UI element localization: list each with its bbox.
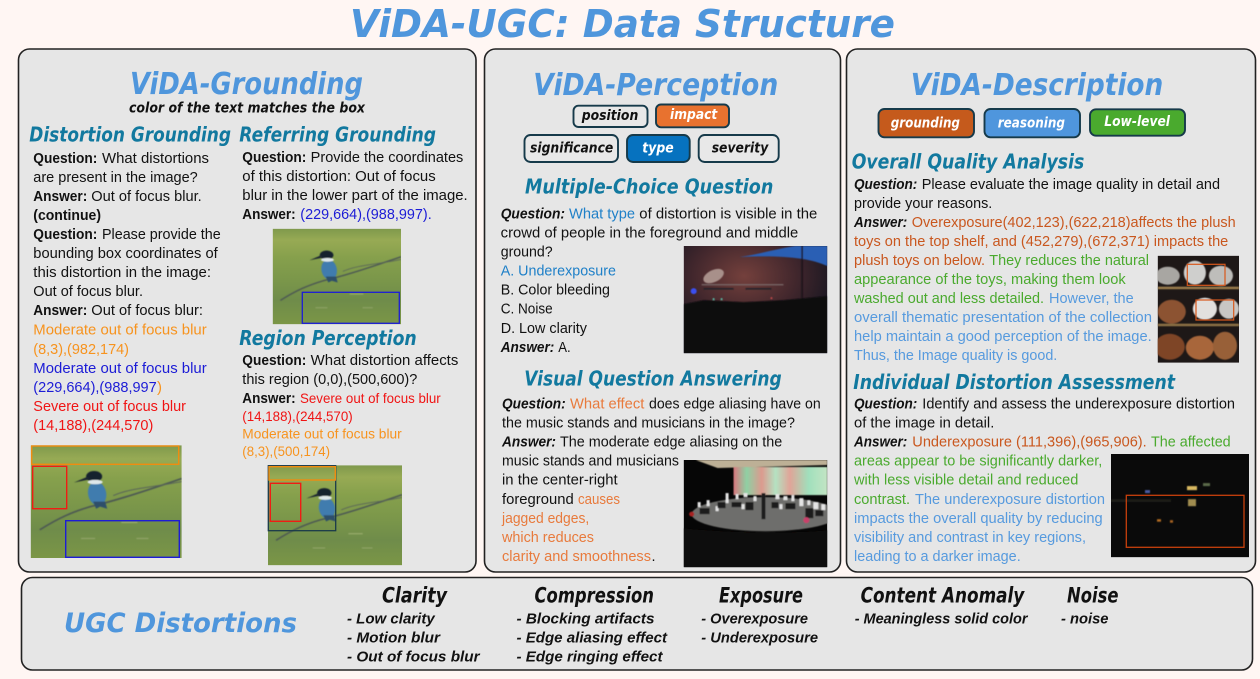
panel: ViDA-Description <box>846 49 1256 572</box>
text block: overall quality Q&A: overall thematic presentation of the collection <box>854 310 1152 326</box>
image: concert crowd <box>684 246 827 353</box>
list: Content Anomaly <box>855 584 1029 627</box>
text block: distortion grounding Q&A: Question: <box>33 151 97 167</box>
text block: distortion grounding Q&A: (14,188),(244,570) <box>33 418 153 434</box>
text block: referring grounding Q&A: Answer: <box>242 207 296 223</box>
text block: distortion grounding Q&A: (8,3),(982,174) <box>33 342 129 358</box>
text block: overall quality Q&A <box>853 177 1236 364</box>
list: Exposure <box>701 584 818 646</box>
text block: referring grounding Q&A <box>242 150 468 223</box>
text block: region perception Q&A: Question: <box>242 353 306 369</box>
text block: individual distortion Q&A: Underexposure (111,396),(965,906). <box>912 434 1147 450</box>
text block: multiple-choice Q&A: What type <box>569 206 635 222</box>
text block: visual question answering Q&A: jagged edges, <box>501 511 589 527</box>
text block: referring grounding Q&A: blur in the lower part of the image. <box>242 188 468 204</box>
panel background: grounding <box>18 49 476 572</box>
tag: significance: significance <box>530 140 613 156</box>
text block: distortion grounding Q&A: Out of focus blur: <box>91 303 203 319</box>
panel: ViDA-Perception <box>484 49 840 572</box>
text block: distortion grounding Q&A: What distortions <box>102 151 209 167</box>
panel background: description <box>846 49 1256 572</box>
image: kingfisher with three boxes <box>31 445 182 558</box>
text block: visual question answering Q&A: clarity and smoothness <box>502 549 651 565</box>
list: Clarity: - Out of focus blur <box>347 649 481 666</box>
list: Clarity: - Low clarity <box>347 610 435 627</box>
text block: multiple-choice Q&A <box>500 206 817 356</box>
text block: individual distortion Q&A: Identify and assess the underexposure distortion <box>922 396 1235 412</box>
text block: visual question answering Q&A: does edge aliasing have on <box>649 396 821 412</box>
text block: referring grounding Q&A: (229,664),(988,997). <box>300 207 432 223</box>
text block: individual distortion Q&A: visibility and contrast in key regions, <box>854 530 1086 546</box>
text block: multiple-choice Q&A: ground? <box>501 244 553 260</box>
list: Noise <box>1061 584 1118 627</box>
list: Exposure: Exposure <box>719 584 803 608</box>
tag: grounding: grounding <box>891 115 960 131</box>
text block: multiple-choice Q&A: C. Noise <box>501 302 553 318</box>
image: kingfisher with region boxes <box>268 465 402 565</box>
text block: visual question answering Q&A: the music stands and musicians in the image? <box>502 415 795 431</box>
tag: reasoning <box>984 109 1080 137</box>
text block: individual distortion Q&A <box>853 396 1235 565</box>
tag: severity <box>699 135 779 162</box>
heading: Distortion Grounding: Distortion Grounding <box>29 122 231 146</box>
text block: individual distortion Q&A: The underexposure distortion <box>915 492 1105 508</box>
text block: distortion grounding Q&A: bounding box coordinates of <box>33 246 219 262</box>
text block: region perception Q&A <box>242 353 458 459</box>
list: Compression: Compression <box>534 584 654 608</box>
text block: multiple-choice Q&A: crowd of people in the foreground and middle <box>501 225 798 241</box>
text block: multiple-choice Q&A: of distortion is visible in the <box>639 206 817 222</box>
text block: distortion grounding Q&A: (229,664),(988,997 <box>33 380 157 396</box>
heading: Overall Quality Analysis: Overall Quality Analysis <box>852 149 1084 173</box>
list: Clarity: Clarity <box>382 584 448 608</box>
list: Compression: - Edge aliasing effect <box>516 630 668 646</box>
text block: individual distortion Q&A: areas appear to be significantly darker, <box>854 454 1102 470</box>
text block: individual distortion Q&A: Question: <box>854 396 917 412</box>
text block: distortion grounding Q&A: this distortion in the image: <box>33 265 211 281</box>
text block: individual distortion Q&A: impacts the overall quality by reducing <box>854 511 1103 527</box>
tag: impact: impact <box>670 107 718 123</box>
panel: UGC Distortions <box>22 578 1252 670</box>
text block: distortion grounding Q&A: Out of focus blur. <box>33 284 143 300</box>
text block: overall quality Q&A: However, the <box>1049 291 1134 307</box>
text block: visual question answering Q&A: What effect <box>570 396 644 412</box>
text block: individual distortion Q&A: of the image in detail. <box>854 415 994 431</box>
tag: type <box>627 135 690 162</box>
text block: visual question answering Q&A <box>501 396 821 565</box>
text block: region perception Q&A: Moderate out of focus blur <box>242 426 402 442</box>
panel background: perception <box>484 49 840 572</box>
text block: visual question answering Q&A: which reduces <box>501 530 594 546</box>
text block: individual distortion Q&A: with less visible detail and reduced <box>853 473 1078 489</box>
text block: overall quality Q&A: Overexposure(402,123),(622,218)affects the plush <box>912 215 1236 231</box>
text block: distortion grounding Q&A: Question: <box>33 227 97 243</box>
tag: significance <box>524 135 618 162</box>
text block: referring grounding Q&A: Provide the coordinates <box>311 150 463 166</box>
text block: distortion grounding Q&A: Severe out of focus blur <box>33 399 186 415</box>
heading: ViDA-Description: ViDA-Description <box>911 68 1163 103</box>
text block: overall quality Q&A: Thus, the Image quality is good. <box>854 348 1057 364</box>
heading: UGC Distortions: UGC Distortions <box>64 608 297 639</box>
heading: ViDA-Perception: ViDA-Perception <box>533 68 778 103</box>
tag: reasoning: reasoning <box>998 115 1065 131</box>
list: Noise: Noise <box>1067 584 1118 608</box>
text block: distortion grounding Q&A: ) <box>157 380 162 396</box>
text block: distortion grounding Q&A: Moderate out of focus blur <box>33 322 207 338</box>
list: Exposure: - Overexposure <box>701 610 808 627</box>
image: plush toys with boxes <box>1155 256 1239 363</box>
text block: individual distortion Q&A: leading to a darker image. <box>854 549 1021 565</box>
list: Noise: - noise <box>1061 610 1108 627</box>
heading: Multiple-Choice Question: Multiple-Choice Question <box>525 174 773 198</box>
subtitle: color of the text matches the box <box>129 100 366 116</box>
text block: referring grounding Q&A: Question: <box>242 150 306 166</box>
list: Exposure: - Underexposure <box>701 630 818 646</box>
tag: position <box>574 106 648 127</box>
text block: overall quality Q&A: Answer: <box>853 215 907 231</box>
text block: overall quality Q&A: toys on the top shelf, and (452,279),(672,371) impacts the <box>854 234 1228 250</box>
tag: type: type <box>642 140 674 156</box>
text block: overall quality Q&A: They reduces the natural <box>989 253 1149 269</box>
text block: overall quality Q&A: plush toys on below. <box>854 253 985 269</box>
tag: grounding <box>878 109 974 137</box>
tag: severity: severity <box>712 140 769 156</box>
heading: ViDA-Grounding: ViDA-Grounding <box>130 67 363 102</box>
text block: referring grounding Q&A: of this distortion: Out of focus <box>242 169 436 185</box>
text block: visual question answering Q&A: The moderate edge aliasing on the <box>560 434 782 450</box>
text block: overall quality Q&A: washed out and less detailed. <box>853 291 1044 307</box>
text block: multiple-choice Q&A: A. Underexposure <box>501 264 616 280</box>
panel: ViDA-Grounding <box>18 49 476 572</box>
text block: distortion grounding Q&A: are present in the image? <box>33 170 198 186</box>
text block: distortion grounding Q&A: Answer: <box>33 189 87 205</box>
text block: distortion grounding Q&A <box>33 151 221 434</box>
text block: overall quality Q&A: help maintain a good perception of the image. <box>854 329 1152 345</box>
text block: overall quality Q&A: Please evaluate the image quality in detail and <box>922 177 1220 193</box>
text block: visual question answering Q&A: foreground <box>502 492 574 508</box>
text block: distortion grounding Q&A: Please provide the <box>102 227 221 243</box>
tag: Low-level: Low-level <box>1104 114 1171 130</box>
text block: region perception Q&A: (14,188),(244,570) <box>242 408 353 424</box>
text block: distortion grounding Q&A: Out of focus blur. <box>91 189 202 205</box>
text block: region perception Q&A: What distortion affects <box>311 353 458 369</box>
heading: Referring Grounding: Referring Grounding <box>239 122 436 146</box>
text block: overall quality Q&A: provide your reasons. <box>854 196 992 212</box>
heading: Region Perception: Region Perception <box>239 326 417 350</box>
text block: individual distortion Q&A: contrast. <box>854 492 910 508</box>
heading: Individual Distortion Assessment: Individual Distortion Assessment <box>853 370 1176 394</box>
text block: region perception Q&A: Answer: <box>242 391 296 407</box>
list: Clarity <box>347 584 481 666</box>
text block: region perception Q&A: this region (0,0),(500,600)? <box>242 372 417 388</box>
list: Compression <box>516 584 668 666</box>
text block: visual question answering Q&A: causes <box>578 492 620 508</box>
text block: distortion grounding Q&A: Moderate out of focus blur <box>33 361 207 377</box>
list: Compression: - Edge ringing effect <box>516 649 664 666</box>
text block: multiple-choice Q&A: B. Color bleeding <box>501 283 610 299</box>
image: kingfisher with blue box <box>273 229 401 324</box>
list: Content Anomaly: Content Anomaly <box>861 584 1025 608</box>
heading: Visual Question Answering: Visual Question Answering <box>524 367 782 391</box>
title: ViDA-UGC: Data Structure <box>350 2 895 46</box>
image: dark night scene with box <box>1111 454 1249 557</box>
text block: visual question answering Q&A: . <box>652 549 656 565</box>
text block: visual question answering Q&A: music stands and musicians <box>502 454 679 470</box>
panel background: distortions <box>22 578 1252 670</box>
text block: multiple-choice Q&A: Answer: <box>500 340 554 356</box>
tag: impact <box>656 104 729 127</box>
text block: visual question answering Q&A: in the center-right <box>502 473 618 489</box>
list: Content Anomaly: - Meaningless solid color <box>855 610 1029 627</box>
text block: visual question answering Q&A: Answer: <box>501 434 556 450</box>
list: Compression: - Blocking artifacts <box>516 610 654 627</box>
text block: individual distortion Q&A: The affected <box>1151 434 1231 450</box>
image: orchestra on stage <box>684 460 839 567</box>
text block: distortion grounding Q&A: Answer: <box>33 303 87 319</box>
text block: region perception Q&A: (8,3),(500,174) <box>242 443 330 459</box>
text block: distortion grounding Q&A: (continue) <box>33 208 101 224</box>
text block: region perception Q&A: Severe out of focus blur <box>300 390 441 406</box>
list: Clarity: - Motion blur <box>347 630 441 646</box>
tag: Low-level <box>1090 109 1185 136</box>
text block: multiple-choice Q&A: D. Low clarity <box>501 321 588 337</box>
tag: position: position <box>581 108 638 124</box>
text block: individual distortion Q&A: Answer: <box>853 434 907 450</box>
text block: visual question answering Q&A: Question: <box>502 396 566 412</box>
text block: overall quality Q&A: Question: <box>854 177 917 193</box>
text block: multiple-choice Q&A: A. <box>558 340 571 356</box>
text block: overall quality Q&A: appearance of the toys, making them look <box>854 272 1126 288</box>
text block: multiple-choice Q&A: Question: <box>501 206 565 222</box>
